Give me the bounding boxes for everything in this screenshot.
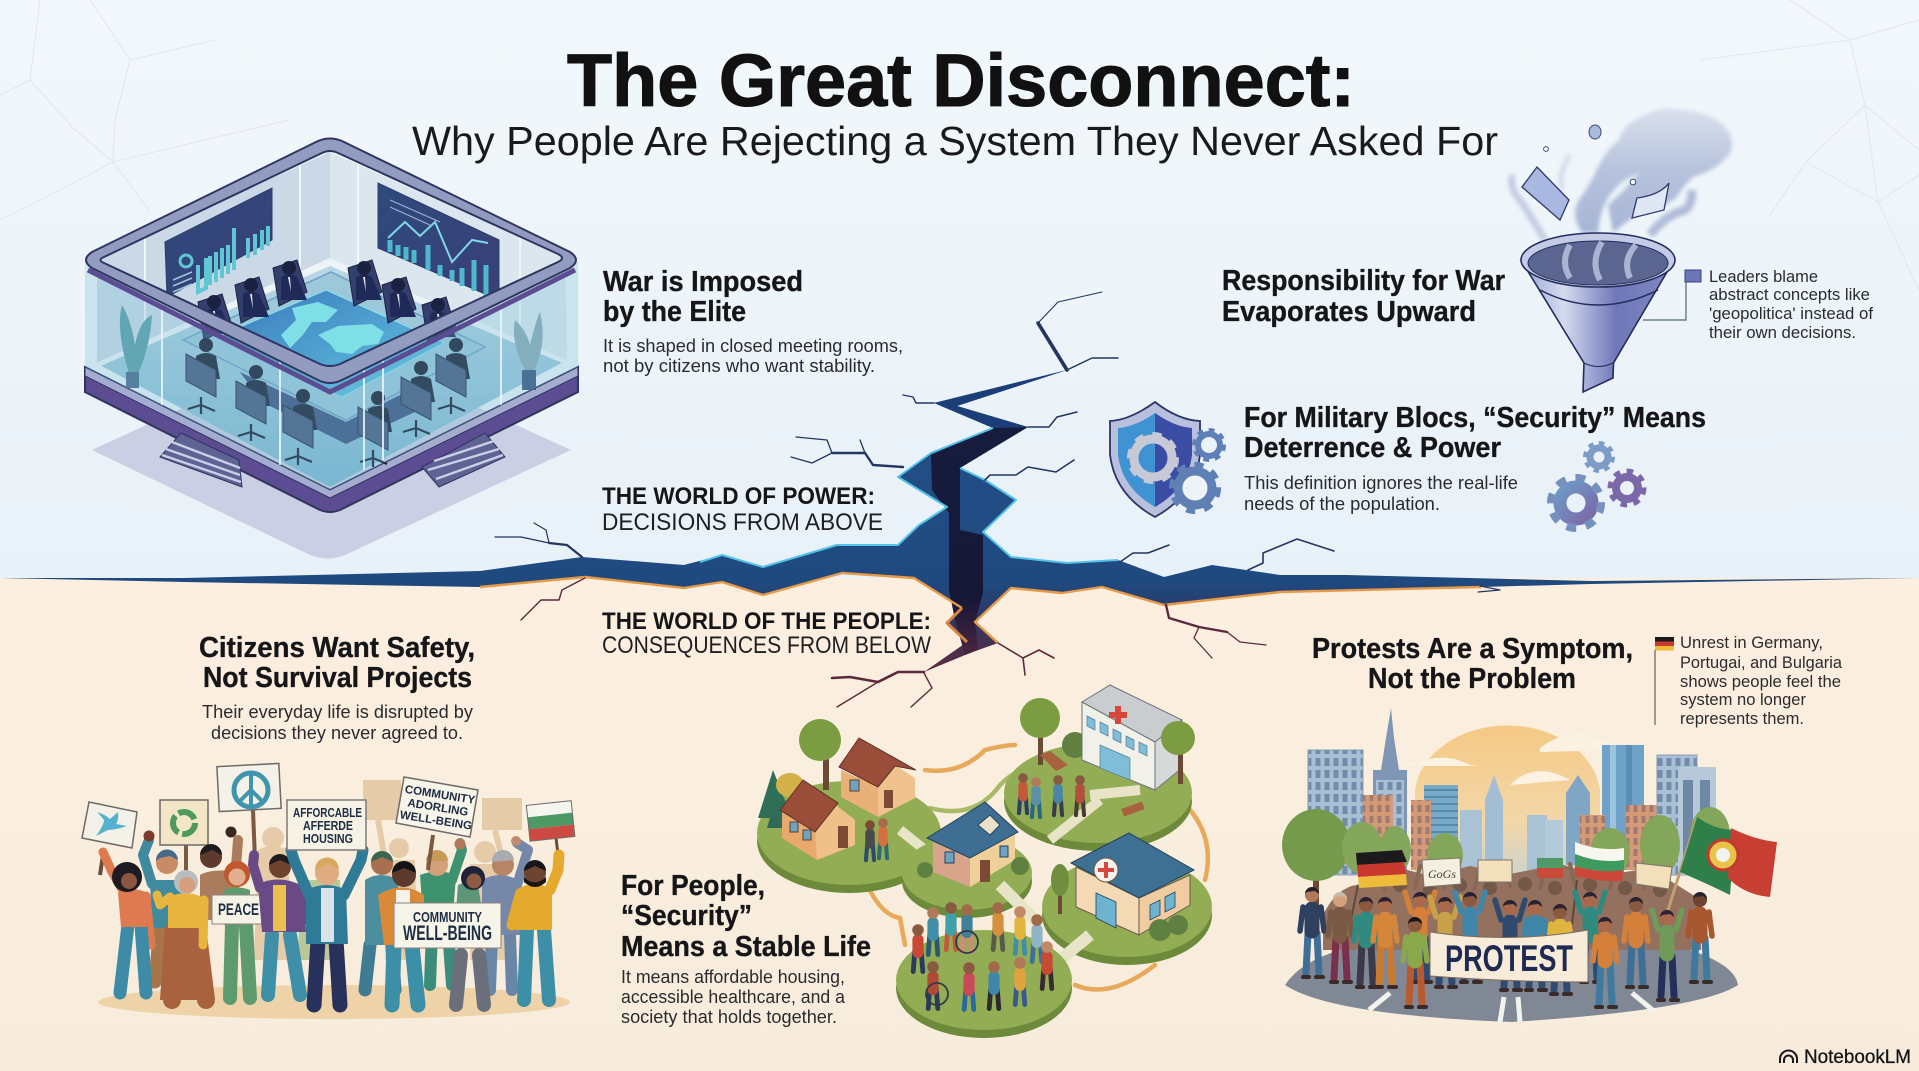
protesters	[1300, 887, 1712, 1007]
sign: community adorling: WELL-BEING	[399, 809, 473, 833]
placards: GoGs	[1428, 867, 1456, 881]
body text: It means affordable housing,	[621, 966, 845, 987]
body text: system no longer	[1680, 690, 1806, 709]
island: clinic	[1042, 833, 1212, 965]
label: the world of the people: CONSEQUENCES FROM BELOW	[602, 632, 931, 659]
body text: decisions they never agreed to.	[211, 722, 463, 743]
island: community circle	[896, 902, 1072, 1038]
protest banner: PROTEST	[1445, 938, 1573, 979]
body text: It is shaped in closed meeting rooms,	[603, 335, 903, 356]
distant crowd	[1323, 864, 1701, 950]
crack dividing the two worlds	[0, 292, 1919, 707]
illustration: city protest	[1282, 708, 1777, 1022]
man in purple jacket	[253, 854, 308, 995]
callout: german flag marker	[1655, 637, 1674, 725]
body text	[202, 701, 474, 743]
background marchers	[143, 826, 528, 990]
man with beard in orange jacket	[378, 861, 424, 1005]
title: The Great Disconnect:	[567, 39, 1355, 122]
sign: community adorling: COMMUNITY	[404, 784, 476, 807]
label: the world of the people: THE WORLD OF THE PEOPLE:	[602, 608, 931, 635]
body text: Unrest in Germany,	[1680, 633, 1823, 652]
illustration: glass boardroom	[85, 138, 578, 558]
body text	[1680, 633, 1843, 728]
placard: bird	[82, 802, 137, 875]
heading: Deterrence & Power	[1244, 432, 1501, 464]
illustration: connected community islands	[757, 685, 1212, 1038]
placard: recycle	[160, 800, 208, 880]
sign: community well-being: COMMUNITY	[413, 909, 482, 926]
man in blue jacket with housing sign	[287, 800, 366, 1005]
icon: three gears	[1551, 444, 1644, 528]
island: hospital	[1004, 685, 1195, 851]
island: houses	[757, 719, 950, 893]
icon: funnel with smoke	[1512, 108, 1732, 392]
subtitle: Why People Are Rejecting a System They Never Asked For	[412, 118, 1498, 164]
sign: community well-being	[394, 903, 501, 948]
body text: 'geopolitica' instead of	[1709, 304, 1873, 323]
sign: affordable housing: AFFERDE	[303, 819, 353, 833]
heading: Not the Problem	[1368, 663, 1576, 695]
body text	[1244, 472, 1518, 514]
conference table with world map	[183, 272, 485, 444]
left wall screen	[165, 188, 272, 297]
right wall screen	[378, 183, 499, 300]
body text	[603, 335, 903, 376]
sign: affordable housing: HOUSING	[303, 832, 353, 846]
heading: Protests Are a Symptom,	[1312, 633, 1633, 665]
heading: Evaporates Upward	[1222, 296, 1476, 328]
heading: “Security”	[621, 900, 752, 932]
heading: by the Elite	[603, 296, 746, 328]
heading	[1312, 633, 1633, 695]
man in yellow sweater	[512, 855, 559, 1000]
illustration: crowd with placards	[82, 763, 575, 1019]
bulgarian flag placard	[526, 801, 575, 870]
body text: society that holds together.	[621, 1006, 837, 1027]
body text: Leaders blame	[1709, 267, 1818, 286]
heading: Citizens Want Safety,	[199, 632, 475, 664]
trees	[1282, 807, 1730, 910]
island: blue house	[902, 802, 1040, 925]
woman with dark hair	[456, 866, 485, 1005]
body text	[1709, 267, 1873, 342]
panel: security for people means stable life	[621, 685, 1212, 1038]
woman in yellow	[157, 870, 212, 1000]
steps	[160, 433, 505, 487]
heading: Means a Stable Life	[621, 931, 871, 963]
panel: protests are a symptom	[1282, 633, 1843, 1022]
body text: abstract concepts like	[1709, 285, 1870, 304]
road	[1285, 950, 1738, 1022]
sign: affordable housing	[287, 800, 366, 850]
body text: shows people feel the	[1680, 672, 1841, 691]
notebooklm logo: NotebookLM	[1804, 1047, 1911, 1068]
body text	[621, 966, 846, 1027]
sun and sky	[1400, 725, 1620, 900]
background: world of the people sand	[0, 578, 1919, 1071]
leader line callout	[1643, 270, 1701, 320]
body text: Portugai, and Bulgaria	[1680, 653, 1843, 672]
placard: peace symbol	[217, 763, 281, 860]
sign: community well-being: WELL-BEING	[403, 922, 492, 945]
label: the world of power: DECISIONS FROM ABOVE	[602, 509, 883, 536]
heading: Responsibility for War	[1222, 265, 1505, 297]
background: world of power sky	[0, 0, 1919, 582]
heading: For People,	[621, 870, 765, 902]
label: the world of power: THE WORLD OF POWER:	[602, 483, 875, 510]
panel: responsibility evaporates upward	[1222, 108, 1873, 392]
heading: Not Survival Projects	[203, 662, 472, 694]
sign: affordable housing: AFFORCABLE	[293, 806, 362, 820]
connecting paths	[865, 745, 1208, 990]
woman in orange	[103, 852, 151, 993]
label: the world of the people	[602, 608, 931, 659]
flag: germany	[1350, 850, 1407, 925]
heading: War is Imposed	[603, 266, 803, 298]
body text: Their everyday life is disrupted by	[202, 701, 474, 722]
sign: community adorling	[396, 777, 478, 870]
skyline	[1308, 708, 1716, 875]
flag: portugal	[1668, 817, 1777, 910]
placards	[1422, 858, 1672, 889]
woman with peace sign	[212, 861, 263, 998]
front row of delegates	[186, 338, 470, 467]
label: the world of power	[602, 483, 883, 536]
panel: war is imposed by the elite	[85, 138, 903, 558]
body text: represents them.	[1680, 709, 1804, 728]
heading	[199, 632, 475, 694]
heading	[1222, 265, 1505, 328]
body text: needs of the population.	[1244, 493, 1440, 514]
back row of delegates	[198, 260, 456, 343]
plants	[120, 305, 543, 390]
heading	[1244, 402, 1706, 464]
icon: shield with gears	[1110, 402, 1224, 517]
body text: not by citizens who want stability.	[603, 355, 875, 376]
panel: citizens want safety	[82, 632, 575, 1019]
panel: military blocs security	[1110, 402, 1706, 528]
heading: For Military Blocs, “Security” Means	[1244, 402, 1706, 434]
sign: community adorling: ADORLING	[407, 797, 469, 819]
body text: their own decisions.	[1709, 323, 1856, 342]
heading	[621, 870, 871, 963]
sign: peace: PEACE	[218, 900, 259, 919]
protest banner	[1430, 930, 1588, 982]
body text: accessible healthcare, and a	[621, 986, 846, 1007]
flag: bulgaria	[1572, 842, 1624, 925]
body text: This definition ignores the real-life	[1244, 472, 1518, 493]
flag: small green red	[1537, 858, 1563, 878]
heading	[603, 266, 803, 328]
